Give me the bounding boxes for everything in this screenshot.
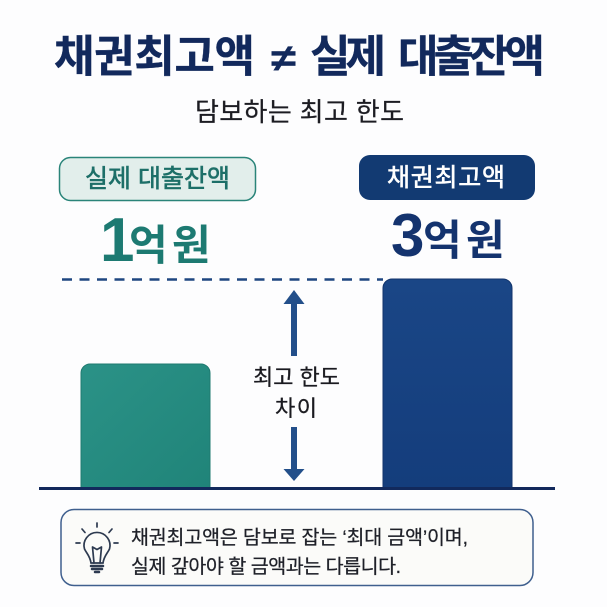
value: 3억 원: 원	[466, 217, 505, 264]
value: 1억 원: 원	[172, 222, 211, 269]
gap label: 최고 한도	[253, 365, 340, 390]
value: 3억 원	[391, 202, 505, 269]
title: 대출잔액	[398, 32, 545, 82]
title	[54, 32, 545, 82]
title: ≠	[271, 38, 296, 80]
gap label	[253, 365, 340, 421]
bar: actual loan balance 1억 원	[81, 364, 210, 488]
label pill: maximum bond amount: 채권최고액	[387, 164, 505, 192]
subtitle: 담보하는 최고 한도	[195, 97, 404, 127]
callout text: 채권최고액은 담보로 잡는 ‘최대 금액’이며,	[131, 527, 468, 549]
value: 1억 원: 1	[100, 206, 134, 275]
title: 채권최고액	[54, 32, 255, 82]
title: 실제	[310, 32, 386, 82]
dashed maximum level line	[62, 278, 383, 281]
callout	[61, 510, 533, 586]
callout text	[131, 527, 468, 578]
label pill: actual loan balance	[60, 158, 256, 200]
value: 1억 원	[100, 206, 211, 275]
arrow: up	[284, 290, 304, 356]
gap label: 차이	[275, 396, 317, 421]
label pill: actual loan balance: 실제 대출잔액	[85, 165, 230, 193]
callout text: 실제 갚아야 할 금액과는 다릅니다.	[131, 556, 401, 578]
bar: maximum bond amount 3억 원	[383, 279, 512, 488]
icon: light bulb	[76, 523, 118, 572]
value: 1억 원: 억	[129, 222, 168, 269]
value: 3억 원: 억	[423, 217, 462, 264]
value: 3억 원: 3	[391, 202, 424, 269]
label pill: maximum bond amount	[359, 155, 535, 200]
arrow: down	[284, 427, 304, 481]
baseline axis	[39, 487, 555, 490]
